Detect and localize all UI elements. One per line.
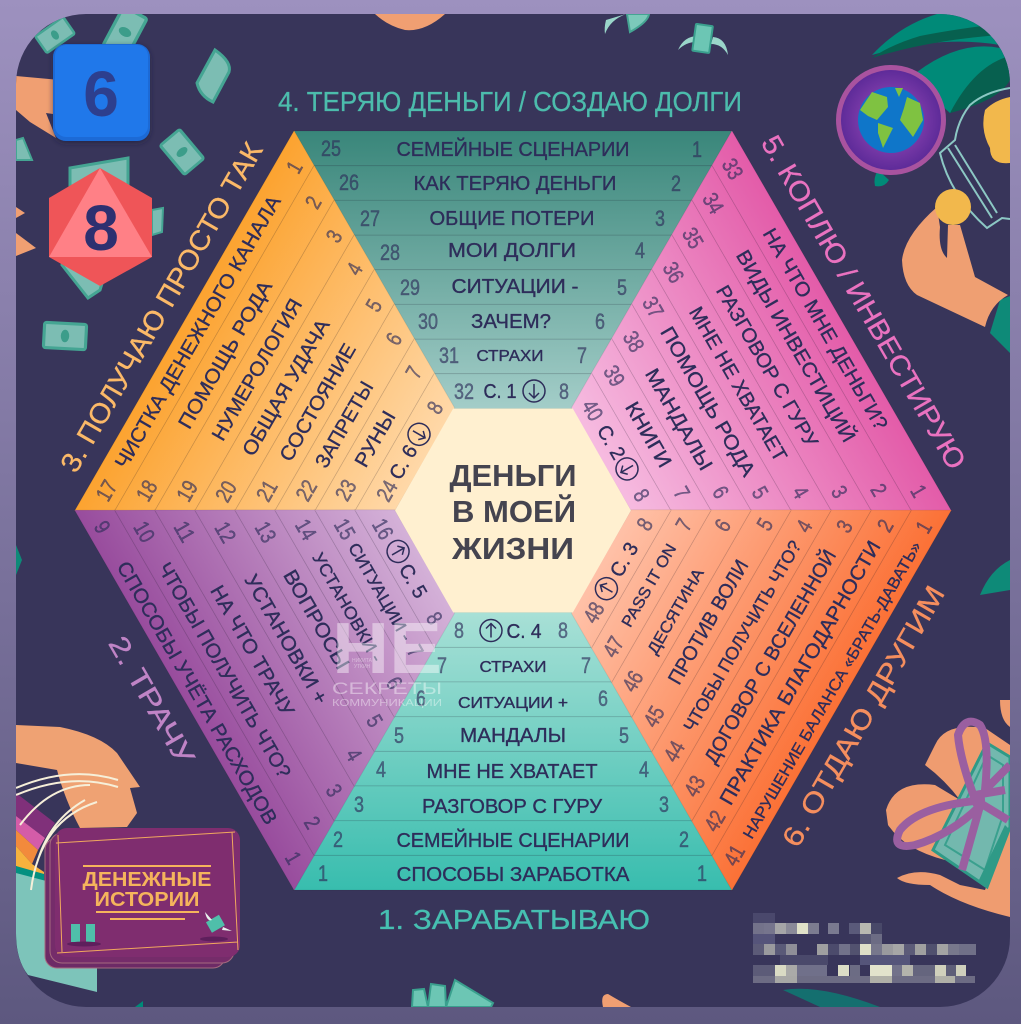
icon: arrow in circle xyxy=(523,380,545,402)
right numbers xyxy=(559,137,702,404)
row labels: РУНЫ xyxy=(351,407,400,471)
right numbers: 7 xyxy=(670,514,697,535)
row labels: СТРАХИ xyxy=(476,348,544,365)
left numbers: 27 xyxy=(360,206,380,231)
hand top edge xyxy=(375,14,445,30)
row labels: PASS IT ON xyxy=(619,541,680,630)
left numbers: 5 xyxy=(394,723,404,748)
row labels: С. 5 xyxy=(394,560,431,602)
row labels: ПОМОЩЬ РОДА xyxy=(655,323,759,481)
right numbers: 6 xyxy=(381,672,408,694)
left numbers: 44 xyxy=(658,736,690,766)
rows xyxy=(75,131,534,650)
right numbers: 6 xyxy=(380,328,407,350)
left numbers: 39 xyxy=(598,361,630,391)
left numbers xyxy=(321,136,474,404)
left numbers: 18 xyxy=(131,476,163,506)
right numbers: 1 xyxy=(910,517,937,538)
left numbers: 20 xyxy=(210,477,242,506)
left numbers: 21 xyxy=(251,476,283,506)
hexagon diagram xyxy=(75,131,951,890)
watermark: КОММУНИКАЦИИ xyxy=(332,698,442,709)
right numbers: 7 xyxy=(668,482,695,503)
left numbers: 6 xyxy=(416,686,426,711)
right numbers: 4 xyxy=(791,516,817,537)
left numbers: 31 xyxy=(439,343,459,368)
left numbers: 14 xyxy=(290,515,322,545)
left numbers: 22 xyxy=(290,476,322,505)
icon: arrow in circle xyxy=(480,620,502,642)
segment 4: top xyxy=(294,131,732,408)
left numbers: 1 xyxy=(318,861,328,886)
row labels xyxy=(548,225,891,555)
jar outline and flowers xyxy=(940,88,1010,228)
row labels: СПОСОБЫ ЗАРАБОТКА xyxy=(396,864,630,886)
right numbers: 6 xyxy=(707,482,734,503)
left numbers: 9 xyxy=(89,517,116,538)
left numbers: 16 xyxy=(367,514,399,544)
left numbers xyxy=(318,618,464,886)
left numbers: 33 xyxy=(717,154,748,184)
row labels: НА ЧТО МНЕ ДЕНЬГИ? xyxy=(758,225,891,434)
left numbers: 45 xyxy=(638,702,670,731)
left numbers: 47 xyxy=(597,632,629,662)
right numbers: 2 xyxy=(299,812,326,833)
icon: arrow in circle xyxy=(383,536,413,566)
row labels: СПОСОБЫ УЧЁТА РАСХОДОВ xyxy=(112,558,281,829)
row labels: ЧИСТКА ДЕНЕЖНОГО КАНАЛА xyxy=(111,192,286,473)
row labels: ДОГОВОР С ВСЕЛЕННОЙ xyxy=(699,545,841,768)
row labels: СЕМЕЙНЫЕ СЦЕНАРИИ xyxy=(396,137,630,161)
left numbers: 42 xyxy=(699,806,731,836)
right numbers: 5 xyxy=(619,723,629,748)
left numbers: 11 xyxy=(169,517,200,546)
left numbers: 12 xyxy=(210,517,241,547)
icon: arrow in circle xyxy=(591,574,621,604)
right numbers: 1 xyxy=(905,481,932,502)
left numbers: 13 xyxy=(250,517,281,547)
right numbers: 3 xyxy=(655,206,665,231)
row labels: МНЕ НЕ ХВАТАЕТ xyxy=(426,761,598,783)
row labels: ЗАПРЕТЫ xyxy=(311,378,378,472)
segment 6: lower right xyxy=(492,371,951,890)
center title: ЖИЗНИ xyxy=(451,531,574,566)
left numbers xyxy=(507,154,818,425)
right numbers: 8 xyxy=(559,379,569,404)
left numbers: 46 xyxy=(617,666,649,696)
game card deck: Денежные истории xyxy=(45,828,240,968)
row labels xyxy=(526,415,925,842)
right numbers xyxy=(211,608,516,868)
right numbers: 2 xyxy=(679,827,689,852)
row labels: МАНДАЛЫ xyxy=(460,725,566,747)
segment 1: bottom xyxy=(294,612,732,890)
heading 6: 6. ОТДАЮ ДРУГИМ xyxy=(776,580,951,852)
right numbers xyxy=(628,364,932,623)
right numbers: 3 xyxy=(831,516,858,537)
row labels: С. 6 xyxy=(385,441,422,484)
row labels: ЧТОБЫ ПОЛУЧИТЬ ЧТО? xyxy=(680,537,805,735)
heading 5: 5. КОПЛЮ / ИНВЕСТИРУЮ xyxy=(755,130,972,475)
left numbers: 28 xyxy=(380,240,400,265)
right numbers: 8 xyxy=(631,514,658,535)
right numbers: 3 xyxy=(826,481,853,502)
flying bills top xyxy=(605,14,728,55)
row labels: СИТУАЦИИ - xyxy=(344,540,416,644)
segment 5: upper right xyxy=(492,131,951,650)
right numbers: 5 xyxy=(361,295,387,316)
icon: blue die with 6: 6 xyxy=(83,58,119,130)
right numbers: 6 xyxy=(595,309,605,334)
row labels xyxy=(112,436,491,829)
left numbers: 40 xyxy=(577,395,608,425)
segment 2: lower left xyxy=(75,371,534,890)
row labels: СИТУАЦИИ - xyxy=(452,276,578,298)
right numbers: 7 xyxy=(577,343,587,368)
row labels: МОИ ДОЛГИ xyxy=(448,240,576,262)
right numbers xyxy=(212,157,517,418)
right numbers xyxy=(631,395,937,656)
right numbers: 4 xyxy=(639,757,649,782)
right numbers: 5 xyxy=(361,710,388,731)
center title: ДЕНЬГИ xyxy=(450,458,576,493)
right numbers: 3 xyxy=(321,780,347,801)
right numbers: 1 xyxy=(692,137,702,162)
left numbers: 23 xyxy=(330,475,362,505)
hand left, fingers xyxy=(16,207,36,256)
left numbers: 35 xyxy=(677,223,709,253)
right numbers: 4 xyxy=(341,258,368,279)
row labels: СЕМЕЙНЫЕ СЦЕНАРИИ xyxy=(396,828,630,852)
row labels: ОБЩИЕ ПОТЕРИ xyxy=(430,208,594,230)
heading 1: 1. ЗАРАБАТЫВАЮ xyxy=(378,904,650,935)
right numbers: 2 xyxy=(300,192,327,213)
row labels xyxy=(111,192,496,594)
game card deck: Денежные истории: ДЕНЕЖНЫЕ xyxy=(82,869,212,891)
game card deck: Денежные истории: ИСТОРИИ xyxy=(94,889,200,911)
right numbers: 1 xyxy=(697,861,707,886)
rows xyxy=(492,371,951,890)
right numbers: 1 xyxy=(281,157,308,178)
right numbers: 2 xyxy=(872,515,899,536)
right numbers: 8 xyxy=(558,618,568,643)
right numbers: 7 xyxy=(400,362,427,383)
left numbers: 29 xyxy=(400,275,420,300)
rows xyxy=(492,131,951,650)
row labels: МНЕ НЕ ХВАТАЕТ xyxy=(684,303,791,466)
left numbers: 25 xyxy=(321,136,341,161)
hands holding money stack bottom right xyxy=(886,700,1010,917)
left numbers: 36 xyxy=(658,257,689,287)
pixelated logo block xyxy=(753,913,976,983)
center hexagon xyxy=(395,408,631,612)
row labels: ДЕСЯТИНА xyxy=(645,566,708,658)
right numbers: 4 xyxy=(635,238,645,263)
row labels: НАРУШЕНИЕ БАЛАНСА «БРАТЬ-ДАВАТЬ» xyxy=(740,539,925,842)
right numbers: 7 xyxy=(402,641,429,662)
left numbers: 2 xyxy=(333,827,343,852)
left numbers: 38 xyxy=(618,327,650,356)
left numbers xyxy=(508,598,820,870)
row labels: С. 2 xyxy=(592,422,629,464)
ribbon xyxy=(897,722,1010,870)
left numbers: 10 xyxy=(128,517,160,547)
left numbers: 15 xyxy=(329,514,361,544)
row labels: КНИГИ xyxy=(620,398,675,472)
rows xyxy=(75,371,534,890)
right numbers: 8 xyxy=(628,485,655,506)
row labels: С. 1 xyxy=(484,381,516,403)
left numbers: 30 xyxy=(418,309,438,334)
row labels: СТРАХИ xyxy=(480,659,546,676)
hand top left xyxy=(16,76,60,138)
icon: globe in purple ring xyxy=(836,65,946,175)
row labels: СИТУАЦИИ + xyxy=(458,695,568,712)
row labels: УСТАНОВКИ + xyxy=(240,571,332,708)
row labels: ЧТОБЫ ПОЛУЧИТЬ ЧТО? xyxy=(153,559,295,782)
icon: red octahedron die with 8: 8 xyxy=(83,192,119,264)
left numbers xyxy=(89,396,399,665)
right numbers: 4 xyxy=(341,744,367,765)
watermark: СЕКРЕТЫ xyxy=(332,679,442,698)
left numbers xyxy=(91,354,403,627)
right numbers: 8 xyxy=(422,397,448,418)
row labels xyxy=(396,621,630,886)
rows xyxy=(294,612,732,890)
row labels: СОСТОЯНИЕ xyxy=(276,340,361,465)
icon: red octahedron die with 8 xyxy=(49,168,152,286)
row labels: ВИДЫ ИНВЕСТИЦИЙ xyxy=(731,245,861,446)
row labels: МАНДАЛЫ xyxy=(640,365,716,475)
left numbers: 19 xyxy=(171,476,203,506)
right numbers: 4 xyxy=(787,482,814,503)
watermark: УТКИН xyxy=(354,664,371,670)
row labels: ПРОТИВ ВОЛИ xyxy=(664,556,753,689)
left numbers: 26 xyxy=(339,170,359,195)
left numbers: 8 xyxy=(454,618,464,643)
row labels: НУМЕРОЛОГИЯ xyxy=(208,295,307,445)
left numbers: 32 xyxy=(454,379,474,404)
right numbers: 5 xyxy=(747,482,773,503)
right numbers: 1 xyxy=(280,847,307,868)
center title: В МОЕЙ xyxy=(452,493,576,529)
row labels: РАЗГОВОР С ГУРУ xyxy=(422,796,602,818)
left numbers: 48 xyxy=(578,598,610,627)
right numbers: 5 xyxy=(752,514,778,535)
hand with strings, rainbow bottom left xyxy=(16,725,140,992)
row labels: ЗАЧЕМ? xyxy=(471,311,551,333)
row labels: КАК ТЕРЯЮ ДЕНЬГИ xyxy=(414,173,616,195)
hand holding coin xyxy=(902,189,1010,353)
watermark: НИКИТА xyxy=(352,658,373,664)
right numbers: 5 xyxy=(617,275,627,300)
left numbers: 7 xyxy=(437,653,447,678)
right numbers xyxy=(558,618,707,886)
left numbers: 24 xyxy=(371,476,403,506)
row labels: УСТАНОВКИ - xyxy=(308,549,386,665)
right numbers: 8 xyxy=(421,608,448,629)
right numbers: 3 xyxy=(659,792,669,817)
leaves top right xyxy=(872,14,1010,186)
row labels: ПОМОЩЬ РОДА xyxy=(174,277,277,433)
row labels: С. 3 xyxy=(606,539,643,581)
row labels: ПРАКТИКА БЛАГОДАРНОСТИ xyxy=(716,537,885,809)
row labels: НА ЧТО ТРАЧУ xyxy=(205,582,298,720)
bills and decorations on bottom and right edge xyxy=(16,545,1010,1007)
left numbers: 34 xyxy=(697,188,729,218)
right numbers: 2 xyxy=(671,171,681,196)
row labels: ОБЩАЯ УДАЧА xyxy=(238,315,335,460)
heading 2: 2. ТРАЧУ xyxy=(102,631,201,770)
icon: arrow in circle xyxy=(404,419,434,449)
row labels xyxy=(396,137,630,403)
left numbers: 3 xyxy=(354,792,364,817)
money: scattered bills top left xyxy=(16,6,229,350)
segment 3: upper left xyxy=(75,131,534,650)
left numbers: 43 xyxy=(679,771,710,801)
right numbers: 3 xyxy=(321,226,347,247)
left numbers: 4 xyxy=(376,757,386,782)
row labels: С. 4 xyxy=(506,621,542,643)
left numbers: 37 xyxy=(637,292,669,322)
right numbers: 2 xyxy=(865,479,892,500)
center title xyxy=(450,458,576,566)
right numbers: 6 xyxy=(709,515,736,536)
row labels: РАЗГОВОР С ГУРУ xyxy=(711,282,822,451)
watermark: НЕ xyxy=(332,609,442,689)
left numbers: 41 xyxy=(718,840,750,870)
right numbers: 7 xyxy=(581,653,591,678)
icon: arrow in circle xyxy=(612,454,642,484)
heading 4: 4. ТЕРЯЮ ДЕНЬГИ / СОЗДАЮ ДОЛГИ xyxy=(278,86,742,117)
left numbers: 17 xyxy=(91,476,122,505)
row labels: ВОПРОСЫ xyxy=(278,566,353,673)
heading 3: 3. ПОЛУЧАЮ ПРОСТО ТАК xyxy=(54,136,269,477)
rows xyxy=(294,131,732,408)
right numbers: 6 xyxy=(598,686,608,711)
icon: blue die with 6 xyxy=(53,44,150,141)
